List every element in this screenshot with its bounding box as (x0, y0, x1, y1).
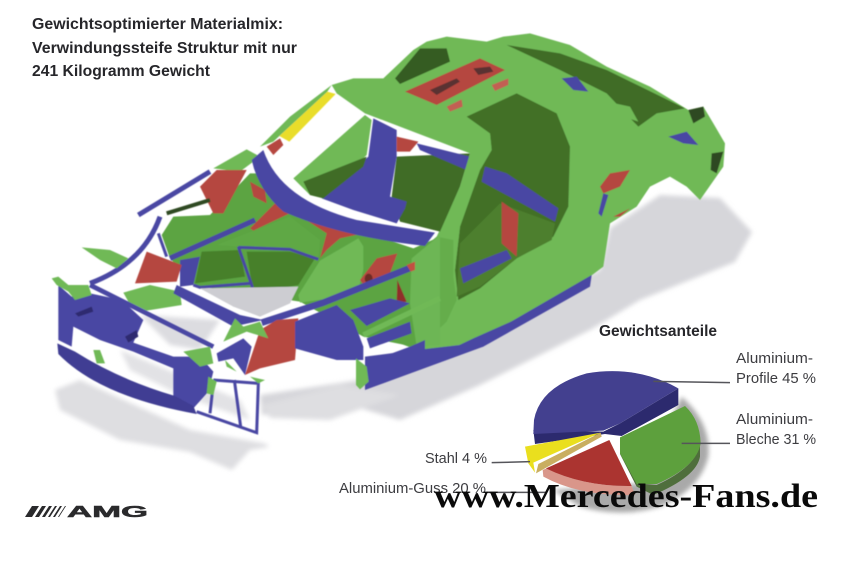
red pillar in door opening (502, 202, 518, 257)
blue sill under door (365, 275, 592, 390)
gray underbody panel (200, 287, 298, 317)
blue sill front end (365, 340, 425, 389)
red node with hole (360, 253, 397, 289)
pie shadow (553, 397, 709, 512)
dash arch (252, 150, 435, 246)
blue front module (58, 285, 213, 408)
red shock tower (245, 318, 298, 375)
segment: Aluminium-Guss 20 % (546, 440, 632, 486)
roof hatch opening (395, 48, 450, 84)
interior through windshield (392, 153, 470, 232)
green sill end cap (356, 358, 369, 389)
mid wheel well upper band (217, 217, 320, 258)
light green side wedge (298, 238, 367, 303)
yellow A pillar (279, 92, 336, 142)
leader lines (487, 381, 730, 492)
green fin on longitudinal (223, 318, 268, 342)
rear deck dark panels (507, 45, 685, 127)
dark red rear bracket (397, 280, 407, 303)
front frame outline (197, 380, 258, 433)
segment: Aluminium-Profile 45 % (533, 371, 678, 434)
red cowl strip (250, 197, 363, 258)
upper red tower (200, 170, 247, 213)
mid section green base (162, 173, 440, 347)
ground shadow of the car structure (55, 195, 752, 470)
door pillar foot panel (400, 237, 457, 350)
blue wheel well rim (193, 247, 318, 292)
red tip of A pillar (267, 138, 283, 155)
rear quarter red parts (600, 170, 630, 193)
title: Gewichtsoptimierter Materialmix: (32, 16, 283, 33)
pie labels: Aluminium-Guss 20 % (339, 480, 486, 497)
front bumper beam (57, 343, 197, 414)
pie chart: weight shares (487, 371, 730, 512)
title: 241 Kilogramm Gewicht (32, 63, 210, 80)
pie labels: Stahl 4 % (425, 450, 487, 467)
segment: Aluminium-Guss side (543, 468, 635, 495)
left side green panel (293, 115, 372, 198)
front section (52, 172, 425, 433)
blue strut (262, 267, 413, 323)
blue upper rails (90, 217, 160, 283)
segment: Aluminium-Profile side (533, 388, 678, 444)
pie labels (339, 350, 816, 497)
blue panel under tube (367, 322, 412, 348)
green side wing (82, 247, 128, 268)
right wheel well (247, 252, 315, 293)
title: Verwindungssteife Struktur mit nur (32, 40, 297, 57)
logo wordmark: AMG (67, 504, 148, 521)
AMG logo (25, 504, 148, 521)
pie labels: Aluminium- (736, 350, 813, 367)
watermark: www.Mercedes-Fans.de (434, 478, 818, 515)
green crash can (123, 285, 182, 311)
floor and rear bulkhead interior (457, 203, 555, 297)
blue mid block left of red (217, 338, 252, 375)
blue upper diagonal rail (170, 220, 255, 258)
segment: Aluminium-Bleche 31 % (620, 406, 701, 484)
red suspension mount (135, 252, 182, 283)
pie labels: Profile 45 % (736, 370, 816, 387)
segment: Stahl 4 % (525, 433, 601, 473)
blue suspension block (295, 305, 363, 360)
rear and door section (260, 33, 725, 390)
dark tube (167, 200, 210, 213)
blue lower panel (350, 298, 410, 326)
red inner bracket (250, 182, 267, 203)
door foot light green (410, 235, 440, 347)
upper cross tube (90, 285, 213, 347)
car body structure (52, 33, 725, 433)
segment: Aluminium-Bleche side (620, 443, 700, 495)
pie labels: Aluminium- (736, 411, 813, 428)
roof red cross member (405, 58, 505, 105)
title (32, 16, 297, 80)
heading: Gewichtsanteile: Gewichtsanteile (599, 323, 717, 340)
door opening interior (455, 93, 570, 300)
blue sill inside door opening (460, 250, 512, 283)
blue rear cross beam (482, 167, 558, 222)
logo stripes (25, 506, 66, 517)
pie labels: Bleche 31 % (736, 431, 816, 448)
green right area (357, 235, 413, 297)
middle section (162, 149, 440, 348)
blue dash arch (252, 150, 435, 246)
small green brackets (52, 277, 92, 300)
green cap above tower (213, 149, 260, 172)
door pillar over the beam (437, 133, 492, 270)
green tube (363, 298, 440, 335)
segment: Stahl side (536, 433, 602, 473)
green main shell (332, 33, 725, 350)
left wheel well (195, 250, 245, 283)
main blue longitudinal (173, 285, 263, 327)
